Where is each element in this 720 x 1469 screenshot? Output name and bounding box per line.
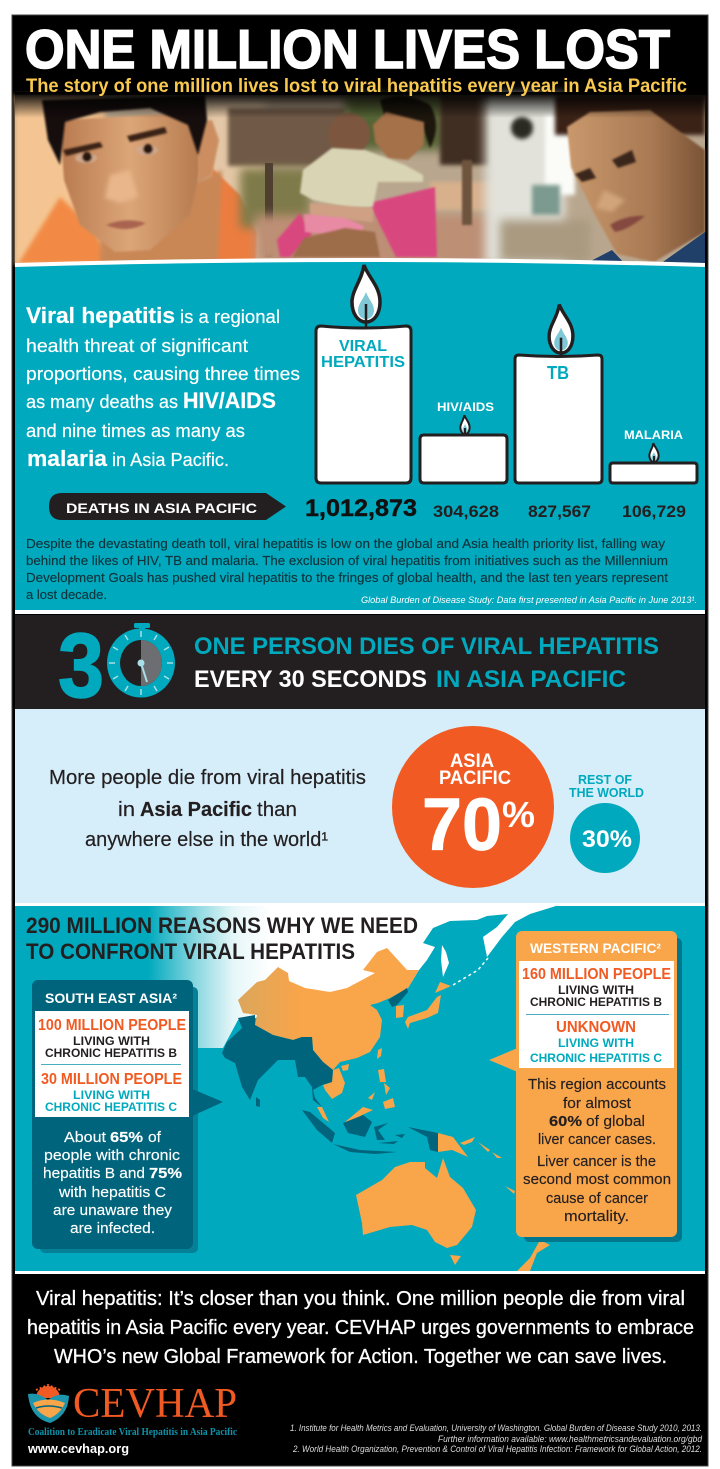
callout: South East Asia: About [64, 1130, 106, 1146]
candle: TB: TB [547, 363, 569, 383]
intro text: and nine times as many as [26, 420, 245, 441]
callout: Western Pacific: mortality. [564, 1209, 629, 1225]
statement text: More people die from viral hepatitis [49, 767, 366, 789]
callout: Western Pacific: Liver cancer is the [537, 1154, 656, 1170]
candle: HIV/AIDS: HIV/AIDS [437, 400, 494, 414]
callout: South East Asia: LIVING WITH [73, 1088, 150, 1102]
circle: Asia Pacific 70%: PACIFIC [439, 768, 511, 789]
candle: viral hepatitis: VIRAL [339, 338, 387, 355]
callout: South East Asia: LIVING WITH [73, 1034, 150, 1048]
icon: logo emblem [28, 1385, 69, 1423]
callout: South East Asia: SOUTH EAST ASIA² [45, 990, 177, 1006]
photo: older woman [485, 95, 705, 265]
callout: South East Asia: are infected. [70, 1221, 155, 1237]
candle: TB [515, 305, 602, 483]
candle: viral hepatitis [316, 265, 411, 483]
photo strip: three faces [15, 92, 705, 265]
death figures: 1,012,873 [305, 495, 417, 522]
closing statement: hepatitis in Asia Pacific every year. CEVHAP urges governments to embrace [27, 1316, 694, 1339]
statement text: than [257, 799, 297, 821]
dark teal countries [222, 988, 438, 1154]
footnotes: Further information available: www.healthmetricsandevaluation.org/gbd [438, 1434, 703, 1444]
label arrow: deaths in Asia Pacific [49, 493, 286, 520]
logo: CEVHAP: Coalition to Eradicate Viral Hepatitis in Asia Pacific [28, 1427, 237, 1438]
candle: viral hepatitis: HEPATITIS [321, 354, 405, 371]
panel: map section [15, 903, 705, 1274]
title: ONE MILLION LIVES LOST [25, 18, 670, 80]
circle: Asia Pacific 70%: % [502, 794, 535, 835]
callout: Western Pacific [489, 931, 682, 1242]
callout: Western Pacific: liver cancer cases. [538, 1132, 656, 1148]
panel: deaths comparison [15, 258, 705, 614]
banner text: ONE PERSON DIES OF VIRAL HEPATITIS [194, 633, 659, 660]
map of Asia Pacific [15, 906, 556, 1271]
callout: Western Pacific: 60% [549, 1114, 582, 1130]
callout: Western Pacific: 160 MILLION PEOPLE [522, 966, 671, 983]
photo: man in orange shirt [15, 95, 265, 265]
callout: South East Asia: 30 MILLION PEOPLE [41, 1071, 182, 1088]
circle: rest of world 30% [569, 773, 644, 873]
death figures [305, 495, 686, 522]
callout: South East Asia: CHRONIC HEPATITIS C [45, 1100, 177, 1114]
callout: Western Pacific: LIVING WITH [558, 983, 634, 997]
closing statement: WHO’s new Global Framework for Action. Together we can save lives. [54, 1345, 667, 1368]
candle: malaria: MALARIA [624, 428, 683, 442]
panel: share of deaths [15, 709, 705, 903]
heading: 290 MILLION REASONS WHY WE NEED [26, 913, 418, 938]
logo: CEVHAP: www.cevhap.org [27, 1441, 129, 1456]
statement text: in [118, 799, 135, 821]
circle: Asia Pacific 70%: ASIA [450, 751, 494, 772]
callout: South East Asia: CHRONIC HEPATITIS B [45, 1046, 177, 1060]
intro text: HIV/AIDS [183, 388, 276, 413]
callout: South East Asia: of [148, 1130, 162, 1146]
intro text: malaria [27, 446, 108, 471]
body paragraph: a lost decade. [26, 587, 107, 602]
callout: Western Pacific: for almost [563, 1096, 631, 1112]
banner text: IN ASIA PACIFIC [436, 666, 626, 693]
statement text [49, 767, 366, 851]
callout: Western Pacific: WESTERN PACIFIC² [530, 940, 661, 956]
circle: rest of world 30%: THE WORLD [569, 786, 644, 800]
closing statement [27, 1287, 694, 1368]
callout: Western Pacific: This region accounts [528, 1077, 666, 1093]
callout: Western Pacific: LIVING WITH [558, 1036, 634, 1050]
candle: HIV/AIDS [420, 400, 507, 483]
callout: Western Pacific: second most common [523, 1172, 671, 1188]
statement text: Asia Pacific [140, 799, 252, 821]
circle: rest of world 30%: REST OF [578, 773, 632, 787]
statement text: anywhere else in the world¹ [85, 829, 328, 851]
callout: South East Asia: are unaware they [53, 1203, 173, 1219]
heading [26, 913, 418, 964]
body paragraph [26, 536, 668, 602]
candle: malaria [610, 428, 697, 483]
callout: Western Pacific: of global [586, 1114, 645, 1130]
callout: South East Asia: people with chronic [44, 1148, 180, 1164]
banner text: EVERY 30 SECONDS [194, 666, 427, 693]
subtitle: The story of one million lives lost to viral hepatitis every year in Asia Pacific [26, 76, 687, 97]
death figures: 106,729 [622, 503, 686, 521]
callout: South East Asia: with hepatitis C [58, 1185, 166, 1201]
icon: stopwatch [107, 623, 175, 698]
circle: Asia Pacific 70%: 70 [422, 783, 502, 866]
callout: Western Pacific: UNKNOWN [556, 1019, 636, 1036]
callout: Western Pacific: CHRONIC HEPATITIS B [530, 995, 662, 1009]
body paragraph: Development Goals has pushed viral hepatitis to the fringes of global health, and the last ten years represent [26, 570, 668, 585]
callout: South East Asia [32, 980, 223, 1253]
China and orange countries [238, 948, 550, 1271]
closing statement: Viral hepatitis: It’s closer than you think. One million people die from viral [36, 1287, 685, 1310]
body paragraph: behind the likes of HIV, TB and malaria. The exclusion of viral hepatitis from initiatives such as the Millennium [26, 553, 668, 568]
footnotes [290, 1423, 703, 1454]
label arrow: deaths in Asia Pacific: DEATHS IN ASIA PACIFIC [66, 500, 257, 516]
callout: South East Asia: hepatitis B and [43, 1166, 145, 1182]
Russia and central Asia land [15, 906, 556, 1048]
logo: CEVHAP [27, 1381, 237, 1456]
banner: every 30 seconds [15, 615, 705, 717]
source note: Global Burden of Disease Study: Data first presented in Asia Pacific in June 2013¹. [361, 595, 697, 606]
big number 3: 3 [58, 615, 104, 717]
circle: rest of world 30%: 30% [582, 826, 632, 853]
intro text: in Asia Pacific. [112, 449, 229, 470]
intro text: health threat of significant [26, 335, 248, 356]
circle: Asia Pacific 70% [392, 726, 554, 888]
death figures: 827,567 [528, 503, 591, 521]
callout: Western Pacific: CHRONIC HEPATITIS C [530, 1051, 662, 1065]
logo: CEVHAP: CEVHAP [73, 1381, 237, 1427]
body paragraph: Despite the devastating death toll, viral hepatitis is low on the global and Asia health priority list, falling way [26, 536, 666, 551]
callout: South East Asia: 65% [110, 1130, 143, 1146]
banner text [194, 633, 659, 693]
intro text: proportions, causing three times [26, 363, 300, 384]
intro text [26, 303, 300, 471]
death figures: 304,628 [433, 503, 499, 521]
callout: South East Asia: 75% [149, 1166, 182, 1182]
intro text: is a regional [180, 306, 280, 327]
callout: Western Pacific: cause of cancer [546, 1191, 648, 1207]
photo: mother and child [228, 95, 500, 263]
intro text: Viral hepatitis [26, 303, 175, 328]
callout: South East Asia: 100 MILLION PEOPLE [38, 1017, 186, 1034]
heading: TO CONFRONT VIRAL HEPATITIS [26, 939, 355, 964]
intro text: as many deaths as [26, 391, 178, 412]
